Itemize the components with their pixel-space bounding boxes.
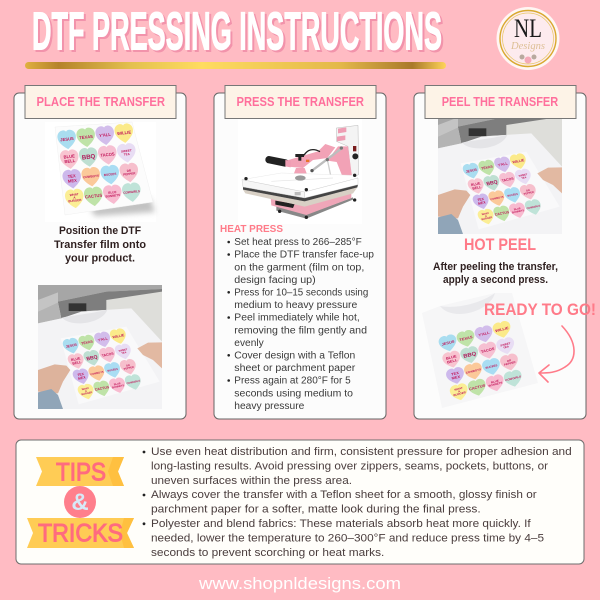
- list: heat press steps: evenly: [234, 338, 264, 349]
- image: transfer sheet of candy hearts: TEX: [67, 173, 76, 179]
- image: transfer placed on t-shirt: COWGIRLS: [126, 379, 141, 385]
- image: finished folded t-shirt: BELL: [447, 358, 458, 365]
- text: second press instruction: apply a second press.: [443, 274, 548, 286]
- image: transfer placed on t-shirt: TACOS: [101, 351, 115, 358]
- panel: place the transfer: [14, 86, 186, 419]
- text: position instruction: [54, 225, 147, 264]
- panel: press the transfer: [214, 86, 386, 419]
- image: transfer placed on t-shirt: PEPPER: [123, 366, 135, 371]
- list: heat press steps: on the garment (film on top,: [234, 262, 364, 273]
- image: transfer placed on t-shirt: BLUE: [70, 356, 82, 362]
- list: heat press steps: Peel immediately while hot,: [234, 313, 360, 324]
- list: tips: needed, lower the temperature to 260–300°F and reduce press time by 4–5: [151, 532, 544, 544]
- image: peeling the transfer on t-shirt: SWEET: [518, 173, 528, 178]
- image: transfer sheet of candy hearts: SWEET: [121, 148, 132, 154]
- image: transfer placed on t-shirt: BURGER: [81, 391, 93, 396]
- list: heat press steps: heavy pressure: [234, 401, 305, 412]
- image: transfer sheet of candy hearts: Y'ALL: [99, 132, 112, 138]
- list: heat press steps: removing the film gently and: [234, 325, 367, 336]
- list: tips: [143, 446, 572, 559]
- list: tips: seconds to prevent scorching or heat marks.: [151, 547, 384, 559]
- list: heat press steps: seconds using medium to: [234, 388, 353, 399]
- image: finished folded t-shirt: DR: [507, 358, 512, 363]
- list: heat press steps: sheet or parchment paper: [234, 363, 356, 374]
- badge: tips and tricks: [27, 457, 134, 548]
- list: heat press steps: design facing up): [234, 275, 316, 286]
- list: heat press steps: Place the DTF transfer face-up: [234, 250, 374, 261]
- image: transfer sheet of candy hearts: TEA: [124, 152, 131, 157]
- image: finished folded t-shirt: TEX: [451, 371, 460, 377]
- image: transfer placed on t-shirt: TEA: [121, 351, 127, 355]
- image: peeling the transfer on t-shirt: BUCEES: [507, 193, 519, 198]
- image: transfer sheet of candy hearts: WILLIE: [117, 129, 132, 136]
- ribbon: tips: TIPS: [56, 459, 106, 487]
- heading: heat press: HEAT PRESS: [220, 223, 283, 235]
- image: transfer sheet of candy hearts: DR: [126, 168, 132, 173]
- image: peeling the transfer on t-shirt: WILLIE: [512, 158, 526, 164]
- image: transfer sheet of candy hearts: COWGIRLS: [123, 189, 140, 195]
- image: transfer placed on t-shirt: SWEET: [118, 348, 128, 353]
- image: peeling the transfer on t-shirt: JESUS: [465, 168, 478, 174]
- image: transfer placed on t-shirt: BELL: [72, 360, 83, 366]
- image: transfer sheet of candy hearts: MEX: [68, 178, 77, 184]
- image: transfer placed on t-shirt: Y'ALL: [97, 336, 109, 342]
- list: tips: Polyester and blend fabrics: These materials absorb heat more quickly. If: [151, 518, 532, 530]
- image: peeling the transfer on t-shirt: BLUE: [514, 207, 522, 211]
- image: finished folded t-shirt: COWGIRLS: [505, 375, 521, 382]
- image: transfer sheet of candy hearts: BONNETS: [105, 193, 120, 199]
- image: transfer placed on t-shirt: MEX: [78, 375, 87, 381]
- image: finished folded t-shirt: PEPPER: [504, 360, 516, 367]
- image: transfer placed on t-shirt: [38, 285, 162, 409]
- panel heading: press the transfer: PRESS THE TRANSFER: [236, 95, 364, 109]
- image: peeling the transfer on t-shirt: WHAT: [481, 212, 490, 216]
- image: peeling the transfer on t-shirt: A: [485, 215, 488, 218]
- panel heading: press the transfer: [225, 86, 376, 118]
- image: peeling the transfer on t-shirt: DR: [526, 189, 531, 193]
- image: transfer sheet of candy hearts: WHAT: [69, 192, 79, 197]
- image: finished folded t-shirt: BURGER: [453, 390, 466, 397]
- panel heading: place the transfer: [25, 86, 176, 118]
- image: transfer placed on t-shirt: TEX: [77, 372, 85, 377]
- list: heat press steps: Set heat press to 266–285°F: [234, 237, 362, 248]
- image: transfer placed on t-shirt: WILLIE: [112, 333, 126, 339]
- gold divider bar: [25, 62, 446, 69]
- image: peeling the transfer on t-shirt: TACOS: [501, 176, 515, 183]
- image: peeling the transfer on t-shirt: BBQ: [486, 179, 499, 187]
- image: transfer sheet of candy hearts: CACTUS: [85, 193, 103, 200]
- text: second press instruction: [433, 261, 558, 286]
- image: transfer sheet of candy hearts: PEPPER: [123, 171, 136, 177]
- list: heat press steps: Cover design with a Teflon: [234, 350, 355, 362]
- image: transfer placed on t-shirt: JESUS: [65, 343, 78, 349]
- image: peeling the transfer on t-shirt: COWGIRLS: [526, 204, 541, 210]
- image: transfer sheet of candy hearts: TEXAS: [79, 134, 93, 140]
- image: transfer sheet of candy hearts: BLUE: [108, 190, 117, 195]
- image: peeling the transfer on t-shirt: BLUE: [470, 181, 482, 187]
- image: finished folded t-shirt: A: [458, 389, 460, 393]
- image: peeling the transfer on t-shirt: Y'ALL: [497, 161, 509, 167]
- image: peeling the transfer on t-shirt: BELL: [472, 185, 483, 191]
- image: transfer sheet of candy hearts: BELL: [64, 158, 76, 164]
- image: transfer sheet of candy hearts: [45, 122, 156, 222]
- image: finished folded t-shirt: TACOS: [481, 347, 495, 354]
- list: tips: Use even heat distribution and firm, consistent pressure for proper adhesion and: [151, 446, 572, 458]
- image: transfer placed on t-shirt: BONNETS: [112, 384, 125, 389]
- list: tips: Always cover the transfer with a Teflon sheet for a smooth, glossy finish or: [151, 489, 537, 501]
- image: transfer placed on t-shirt: A: [85, 390, 88, 393]
- image: transfer placed on t-shirt: COWBOYS: [90, 371, 104, 376]
- image: transfer placed on t-shirt: DR: [126, 364, 131, 368]
- image: transfer sheet of candy hearts: BURGER: [68, 198, 82, 203]
- image: transfer placed on t-shirt: BUCEES: [107, 368, 119, 373]
- image: finished folded t-shirt: BUCEES: [485, 363, 498, 370]
- image: peeling the transfer on t-shirt: [438, 110, 562, 234]
- image: finished folded t-shirt: JESUS: [441, 340, 455, 347]
- image: peeling the transfer on t-shirt: BONNETS: [512, 209, 525, 214]
- image: transfer placed on t-shirt: BBQ: [86, 354, 99, 362]
- image: finished folded t-shirt: SWEET: [500, 341, 511, 347]
- image: transfer sheet of candy hearts: A: [73, 195, 77, 200]
- list: heat press steps: Press again at 280°F for 5: [234, 376, 351, 387]
- image: peeling the transfer on t-shirt: MEX: [478, 200, 487, 206]
- image: finished folded t-shirt: TEA: [503, 345, 509, 350]
- image: peeling the transfer on t-shirt: TEA: [521, 176, 527, 180]
- panel heading: place the transfer: PLACE THE TRANSFER: [36, 95, 165, 109]
- image: transfer sheet of candy hearts: TACOS: [100, 151, 115, 158]
- image: transfer sheet of candy hearts: BLUE: [63, 153, 75, 160]
- text: position instruction: Transfer film onto: [54, 239, 147, 251]
- image: transfer sheet of candy hearts: BBQ: [81, 153, 96, 162]
- image: transfer sheet of candy hearts: BUCEES: [104, 172, 117, 177]
- panel heading: peel the transfer: [425, 86, 576, 118]
- image: transfer placed on t-shirt: TEXAS: [81, 339, 94, 346]
- list: heat press steps: [227, 237, 374, 412]
- image: peeling the transfer on t-shirt: PEPPER: [523, 191, 535, 196]
- logo: NL: [514, 14, 542, 43]
- panel: peel the transfer: [414, 86, 586, 419]
- ampersand circle: &: [71, 489, 89, 516]
- logo: [496, 7, 560, 70]
- panel heading: peel the transfer: PEEL THE TRANSFER: [442, 95, 558, 109]
- image: pink heat press: [238, 119, 362, 224]
- list: tips: long-lasting results. Avoid pressing over zippers, seams, pockets, buttons, or: [151, 460, 548, 472]
- image: peeling the transfer on t-shirt: COWBOYS: [490, 196, 504, 201]
- image: finished folded t-shirt: TEXAS: [459, 335, 473, 342]
- text: second press instruction: After peeling the transfer,: [433, 261, 558, 273]
- website url: www.shopnldesigns.com: [198, 574, 401, 593]
- image: finished folded t-shirt: COWBOYS: [466, 367, 481, 375]
- text: position instruction: Position the DTF: [59, 225, 142, 237]
- text: position instruction: your product.: [65, 252, 135, 264]
- image: finished folded t-shirt: MEX: [451, 375, 461, 381]
- logo: Designs: [510, 40, 545, 52]
- list: tips: parchment paper for a softer, matte look during the final press.: [151, 504, 481, 516]
- image: finished folded t-shirt: BLUE: [491, 379, 499, 384]
- image: finished folded t-shirt: Y'ALL: [478, 331, 491, 337]
- image: finished folded t-shirt: BLUE: [446, 354, 457, 361]
- image: finished folded t-shirt: BBQ: [463, 351, 477, 360]
- heading: hot peel: HOT PEEL: [464, 236, 536, 254]
- image: peeling the transfer on t-shirt: TEXAS: [481, 164, 494, 171]
- arrow: pointing to finished shirt: [539, 326, 574, 382]
- image: transfer placed on t-shirt: WHAT: [81, 387, 90, 391]
- image: peeling the transfer on t-shirt: BURGER: [481, 216, 493, 221]
- image: finished folded t-shirt: [422, 293, 538, 408]
- image: transfer placed on t-shirt: BLUE: [114, 382, 122, 386]
- image: transfer placed on t-shirt: CACTUS: [94, 385, 110, 392]
- panel: tips and tricks: [16, 440, 584, 564]
- list: heat press steps: Press for 10–15 seconds using: [234, 288, 368, 298]
- image: transfer sheet of candy hearts: JESUS: [60, 136, 74, 142]
- image: finished folded t-shirt: WILLIE: [495, 326, 510, 333]
- list: heat press steps: medium to heavy pressure: [234, 300, 358, 311]
- image: finished folded t-shirt: BONNETS: [488, 381, 503, 388]
- image: finished folded t-shirt: WHAT: [454, 386, 463, 392]
- image: peeling the transfer on t-shirt: CACTUS: [494, 210, 510, 217]
- image: peeling the transfer on t-shirt: TEX: [477, 197, 485, 202]
- list: tips: uneven surfaces within the press area.: [151, 475, 352, 487]
- ribbon: tricks: TRICKS: [38, 520, 123, 548]
- image: transfer sheet of candy hearts: COWBOYS: [83, 174, 99, 179]
- image: finished folded t-shirt: CACTUS: [469, 384, 486, 391]
